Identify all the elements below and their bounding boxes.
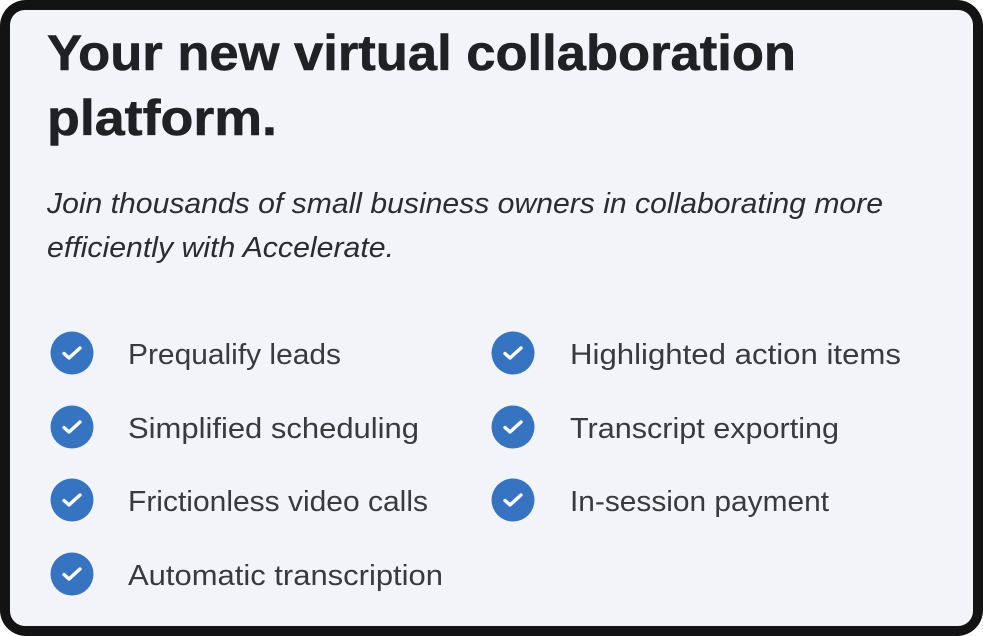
item: In-session payment	[492, 478, 829, 522]
subheading text: Join thousands of small business owners in collaborating more	[46, 188, 883, 220]
item: Frictionless video calls: Frictionless video calls	[128, 486, 428, 518]
item: Highlighted action items	[492, 332, 901, 374]
item: Simplified scheduling	[50, 406, 419, 448]
item: Automatic transcription	[50, 552, 443, 596]
subheading text: efficiently with Accelerate.	[47, 232, 394, 264]
item: Transcript exporting: Transcript exporting	[570, 413, 839, 445]
heading: Your new virtual collaboration	[47, 25, 796, 81]
item: Simplified scheduling: Simplified scheduling	[128, 413, 419, 445]
feature list: left column	[50, 332, 443, 596]
heading: platform.	[47, 90, 277, 146]
item: Automatic transcription: Automatic transcription	[128, 560, 443, 592]
item: Transcript exporting	[492, 406, 839, 448]
subheading text	[46, 188, 883, 264]
feature list: right column	[492, 332, 901, 522]
item: Prequalify leads	[50, 332, 341, 374]
heading	[47, 25, 796, 146]
item: In-session payment: In-session payment	[570, 486, 829, 518]
item: Prequalify leads: Prequalify leads	[128, 339, 341, 371]
item: Highlighted action items: Highlighted action items	[570, 339, 901, 371]
item: Frictionless video calls	[50, 478, 428, 522]
